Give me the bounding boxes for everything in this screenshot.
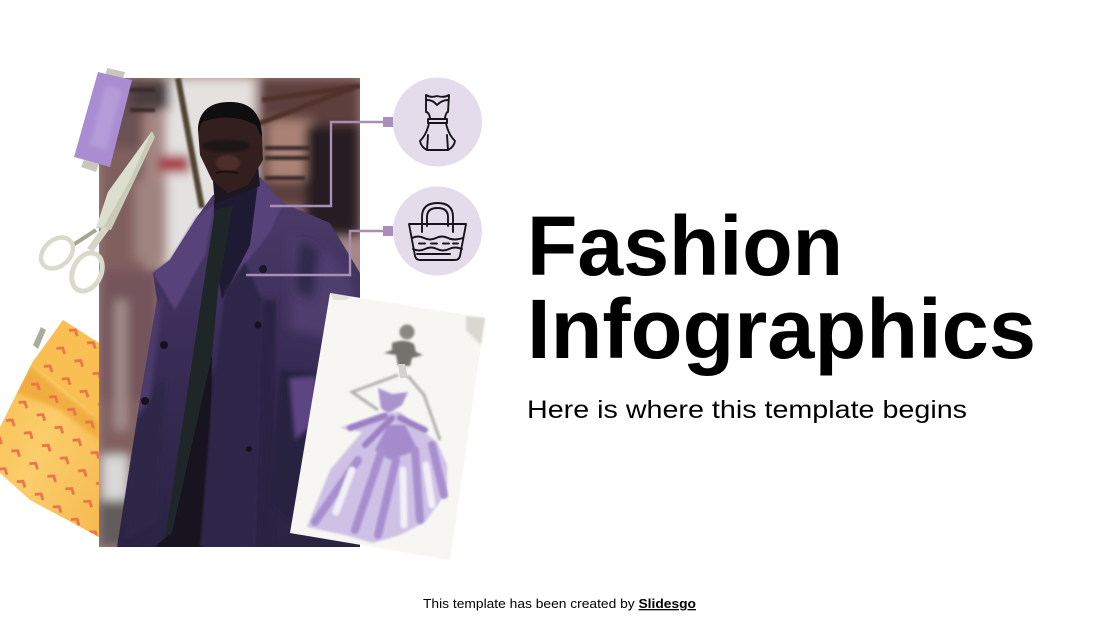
subtitle: Here is where this template begins [527,396,967,424]
thread spool [74,68,132,172]
photo: man in purple coat [99,78,360,547]
footer credit: This template has been created by Slidesgo [423,596,696,611]
purple gown [307,388,447,543]
fabric roll [0,320,99,537]
connector lines [246,117,393,275]
icon: dress [393,78,482,166]
title: Infographics [527,282,1036,376]
title [527,199,1036,376]
figure head and arms [352,324,440,440]
head [198,102,263,204]
fashion sketch paper [290,293,485,560]
slide canvas [0,68,1033,610]
photo background: blurred street [99,78,360,547]
title: Fashion [527,199,843,293]
scissors [35,131,155,296]
icon: handbag [393,186,482,276]
coat [117,177,360,547]
